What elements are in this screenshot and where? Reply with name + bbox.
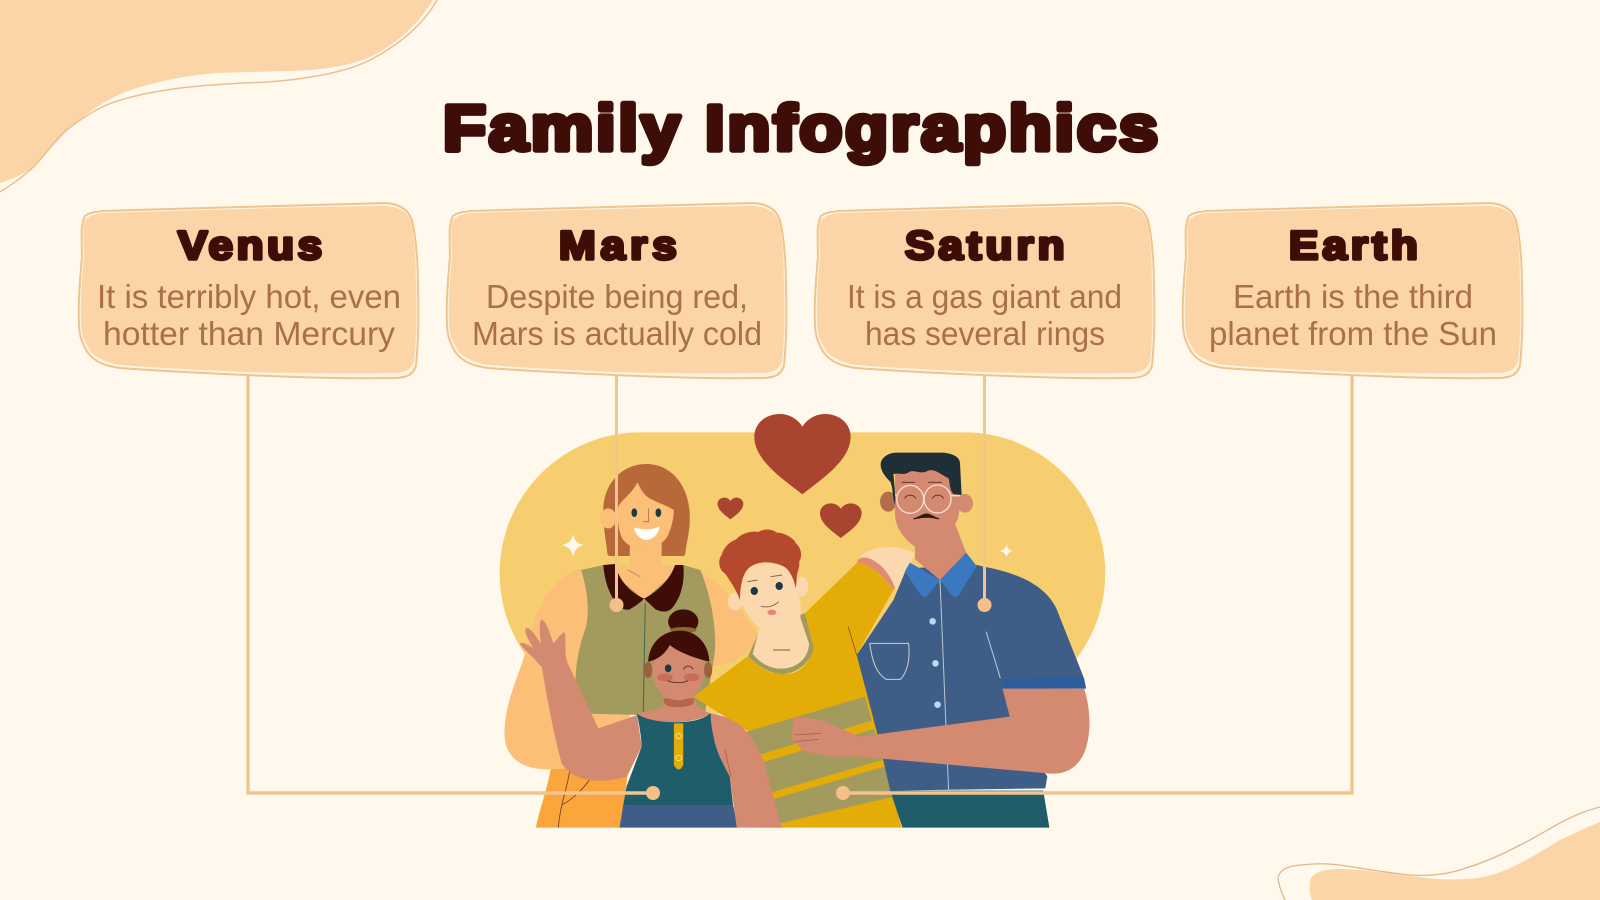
description: has several rings [865, 315, 1105, 352]
small heart right [820, 503, 862, 538]
sparkle right [1000, 544, 1013, 558]
description: planet from the Sun [1209, 315, 1497, 352]
description: It is a gas giant and [847, 278, 1122, 315]
heading: Saturn [905, 223, 1065, 268]
connector: Mars [610, 372, 624, 612]
connector: Venus [248, 372, 660, 800]
heading: Earth [1289, 223, 1418, 268]
description: It is terribly hot, even [97, 278, 401, 315]
card: Earth [1183, 203, 1522, 378]
decorative blob: top left [0, 0, 437, 192]
large heart [754, 414, 851, 494]
illustration: family [500, 414, 1105, 828]
card: Mars [447, 203, 786, 378]
sparkle left [562, 534, 584, 557]
figure: mother [504, 464, 762, 828]
heading: Venus [178, 223, 322, 268]
yellow background shape [500, 432, 1105, 714]
connector: Saturn [978, 372, 992, 612]
connector: Earth [836, 372, 1352, 800]
description: Earth is the third [1233, 278, 1473, 315]
heading: Mars [559, 223, 677, 268]
description: hotter than Mercury [103, 315, 396, 352]
card: Venus [79, 203, 418, 378]
card: Saturn [815, 203, 1154, 378]
description: Mars is actually cold [472, 315, 762, 352]
title: Family Infographics [443, 93, 1158, 164]
figure: father [792, 453, 1089, 828]
figure: son [693, 529, 915, 828]
decorative blob: bottom right [1278, 807, 1600, 900]
figure: daughter [520, 609, 782, 828]
description: Despite being red, [486, 278, 748, 315]
small heart left [718, 498, 743, 519]
